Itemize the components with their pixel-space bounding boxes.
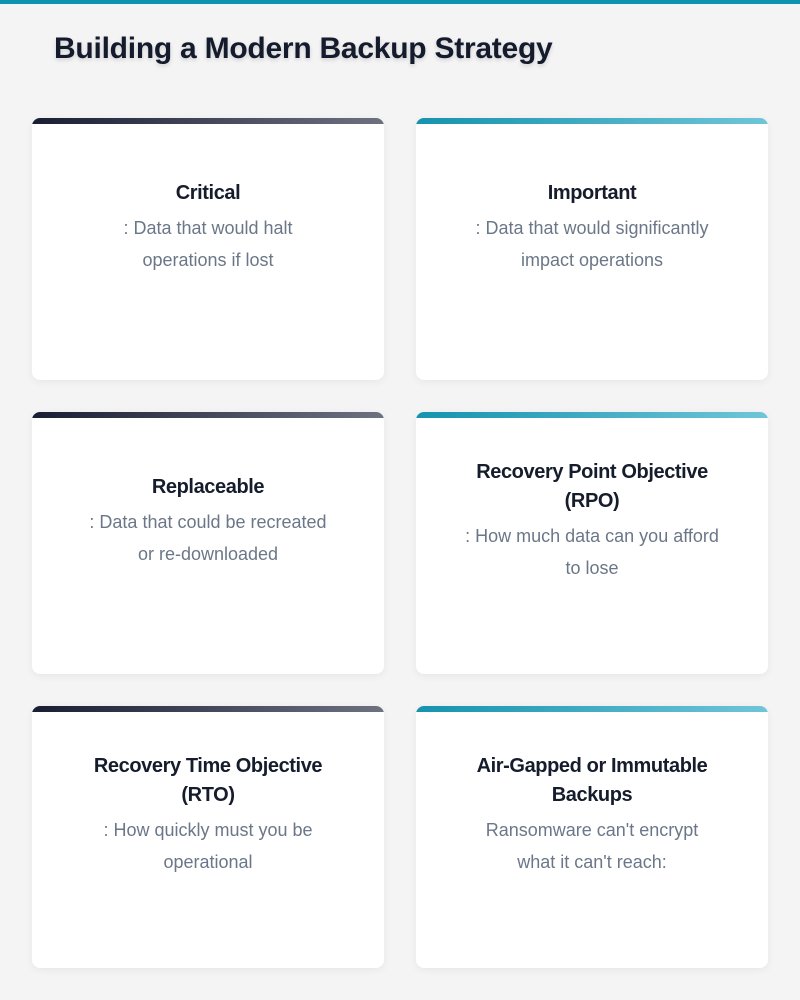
panel: critical: : Data that would halt xyxy=(123,218,293,238)
panel: RTO: Recovery Time Objective xyxy=(94,755,322,777)
panel: RTO: : How quickly must you be xyxy=(103,820,313,840)
panel: air-gapped xyxy=(416,706,768,968)
panel: RPO: : How much data can you afford xyxy=(465,526,719,546)
panel: RTO: operational xyxy=(163,852,253,872)
panel: air-gapped: Air-Gapped or Immutable xyxy=(477,755,707,777)
panel: air-gapped: Ransomware can't encrypt xyxy=(486,820,698,840)
panel: air-gapped: what it can't reach: xyxy=(517,852,667,872)
panel: critical: operations if lost xyxy=(142,250,274,270)
panel: replaceable: Replaceable xyxy=(152,476,264,498)
panel: RPO: (RPO) xyxy=(565,490,619,512)
panel: critical: Critical xyxy=(176,182,240,204)
panel: important: Important xyxy=(548,182,636,204)
panel: RPO xyxy=(416,412,768,674)
panel: important: impact operations xyxy=(521,250,663,270)
panel: critical xyxy=(32,118,384,380)
panel: RPO: to lose xyxy=(565,558,619,578)
title: Building a Modern Backup Strategy xyxy=(54,32,552,65)
panel: important xyxy=(416,118,768,380)
panel: important: : Data that would significantly xyxy=(475,218,709,238)
panel: RPO: Recovery Point Objective xyxy=(476,461,708,483)
panel: air-gapped: Backups xyxy=(552,784,632,806)
panel: replaceable: : Data that could be recreated xyxy=(89,512,327,532)
top accent bar xyxy=(0,0,800,4)
panel: replaceable xyxy=(32,412,384,674)
panel: RTO: (RTO) xyxy=(181,784,235,806)
panel: replaceable: or re-downloaded xyxy=(138,544,278,564)
panel: RTO xyxy=(32,706,384,968)
